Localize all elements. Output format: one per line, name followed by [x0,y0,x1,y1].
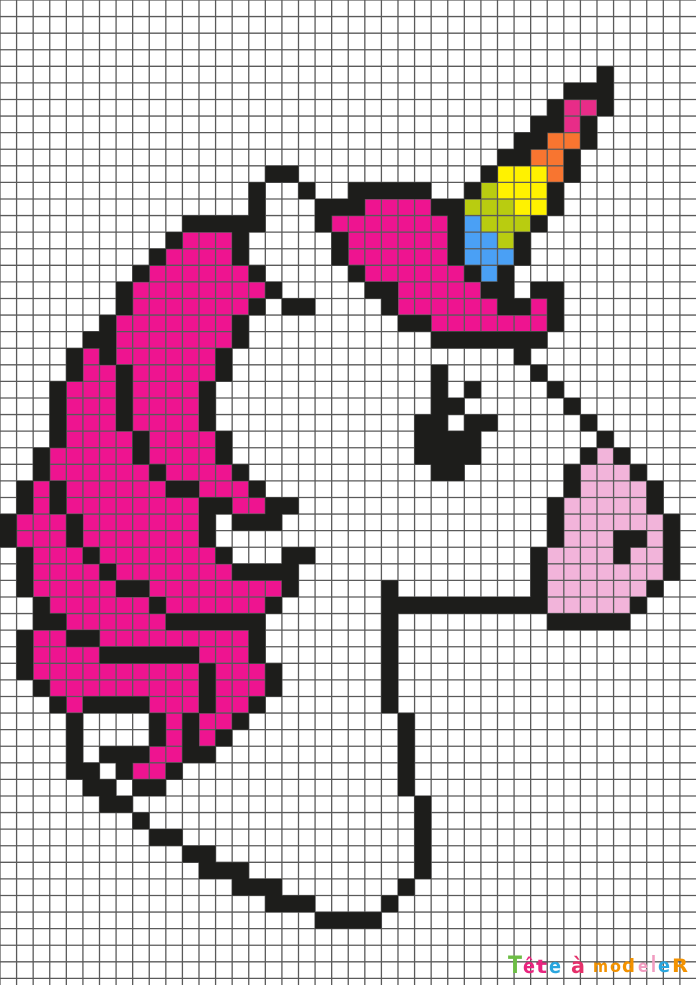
horn: rainbow bands [464,99,597,282]
logo: Tête à modeler: o [610,957,621,977]
horn band: blue [464,216,514,282]
horn band: yellow [497,166,547,216]
logo: Tête à modeler: t [536,956,547,978]
mane and forelock: magenta cells [17,199,547,779]
logo: Tête à modeler: l [651,953,656,978]
eye: black cells [415,365,497,481]
logo: Tête à modeler: e [638,957,648,977]
logo: Tête à modeler: m [593,957,608,977]
logo: Tête à modeler: R [672,955,688,977]
logo: Tête à modeler: e [549,954,561,978]
logo: Tête à modeler [508,951,688,979]
horn tip: pink [564,99,597,133]
logo: Tête à modeler: ê [523,954,535,978]
logo: Tête à modeler: T [508,951,523,979]
horn band: lime green [464,182,531,249]
nostril: black cells [614,531,647,564]
logo: Tête à modeler: d [622,955,635,977]
muzzle: light pink cells [547,448,663,614]
logo: Tête à modeler: à [571,954,585,978]
horn band: orange [531,133,580,182]
logo: Tête à modeler: e [658,955,670,977]
